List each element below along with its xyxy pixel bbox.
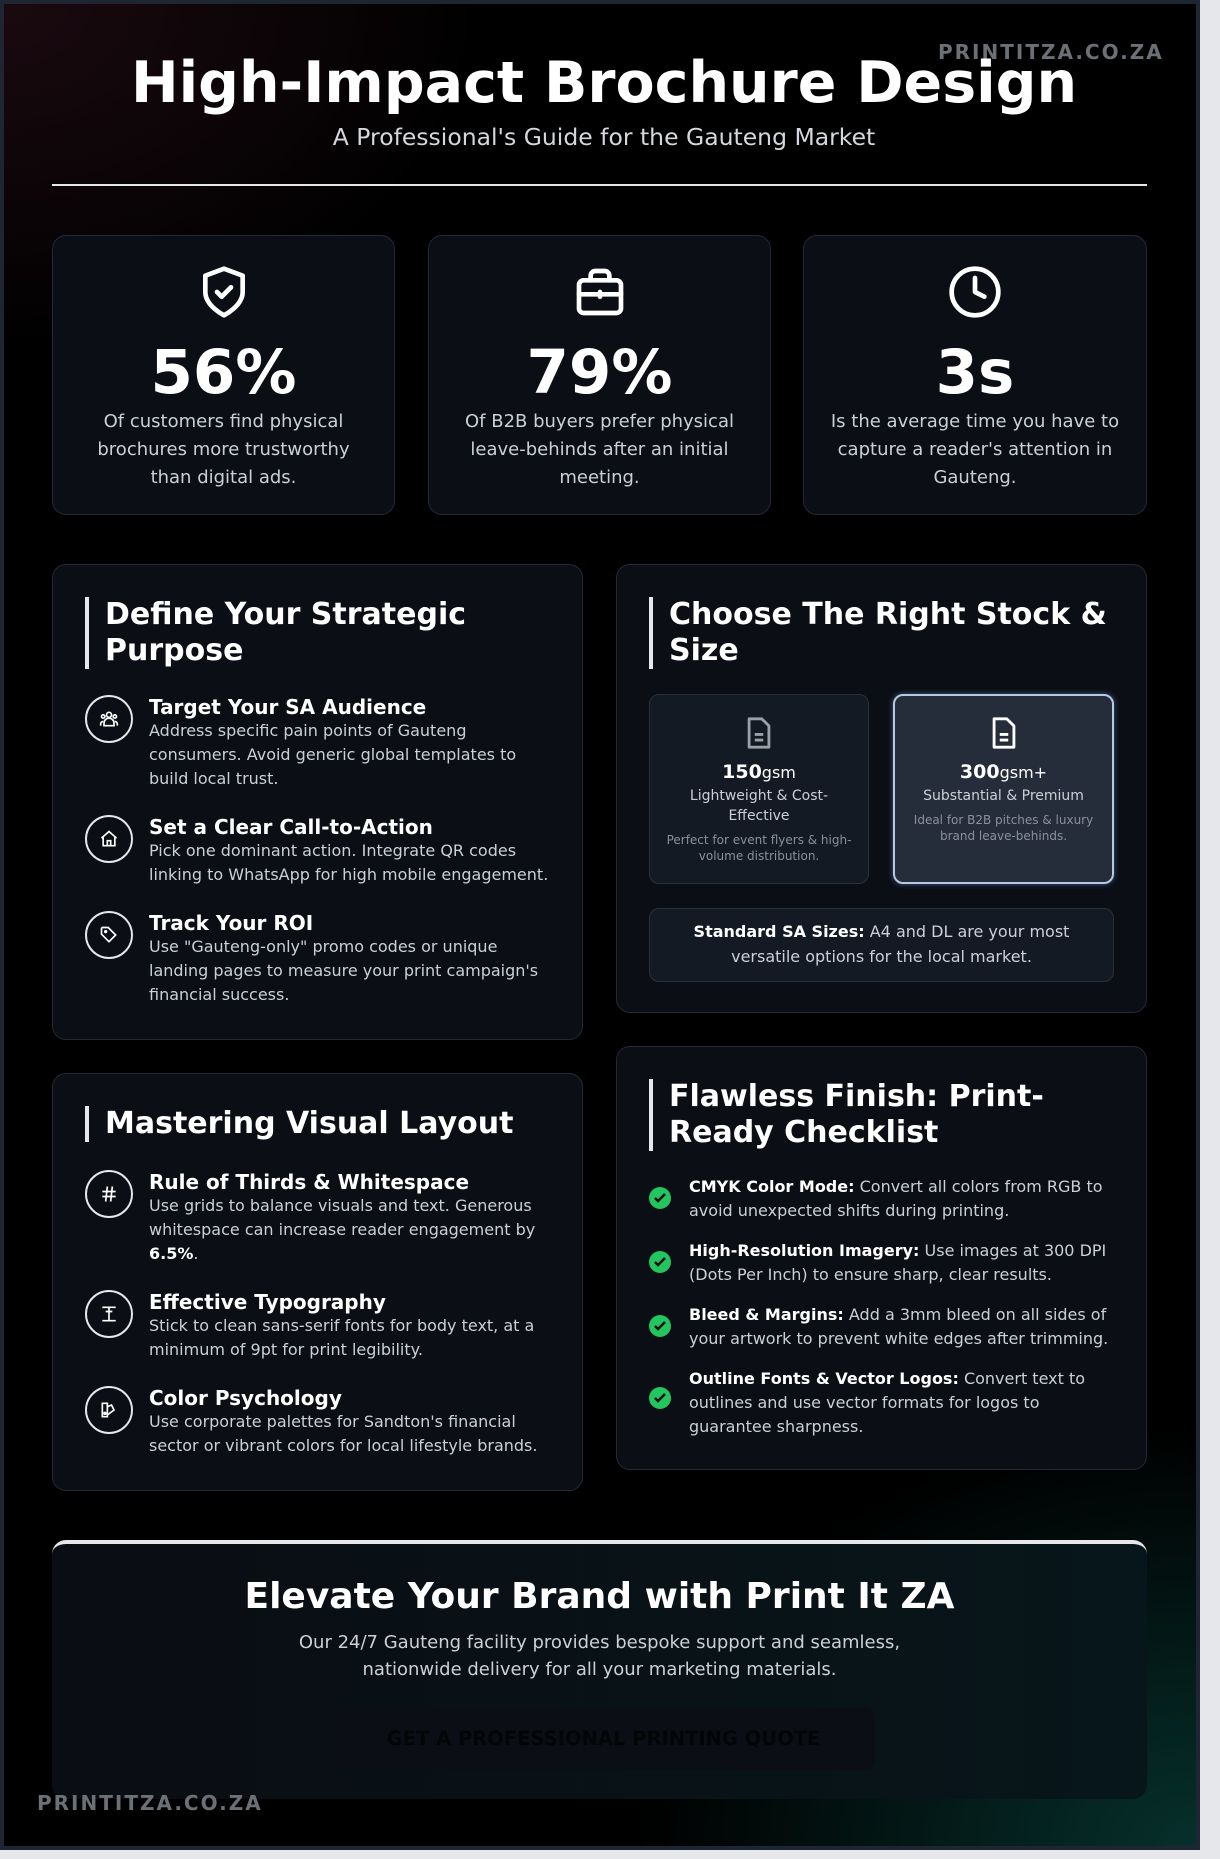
stat card 1: Of customers find physical brochures more trustworthy than digital ads.: [97, 411, 350, 488]
stat card 2: 79%: [526, 337, 672, 408]
CTA text: [299, 1632, 900, 1680]
item: audience: Address specific pain points of Gauteng consumers. Avoid generic global templates to build local trust.: [149, 721, 516, 788]
heading: [85, 597, 466, 669]
stat card 3: 3s: [936, 337, 1014, 408]
item: rule of thirds: Rule of Thirds & Whitespace: [149, 1170, 469, 1194]
heading: Purpose: [105, 633, 243, 668]
panel: print-ready checklist: [616, 1046, 1147, 1470]
check: resolution: High-Resolution Imagery: Use images at 300 DPI (Dots Per Inch) to ensure sharp, clear results.: [689, 1241, 1106, 1284]
icon: briefcase: [576, 268, 624, 316]
item: ROI: [85, 911, 538, 1004]
item: ROI: Use "Gauteng-only" promo codes or unique landing pages to measure your print campaign's financial success.: [149, 937, 538, 1004]
CTA button: GET A PROFESSIONAL PRINTING QUOTE: [387, 1727, 820, 1750]
watermark top: PRINTITZA.CO.ZA: [938, 40, 1164, 64]
watermark bottom: PRINTITZA.CO.ZA: [37, 1791, 263, 1815]
stock card 150gsm: [649, 694, 869, 884]
item: rule of thirds: [85, 1170, 535, 1263]
stat card 2: [428, 235, 771, 515]
CTA button: [332, 1708, 875, 1770]
item: color: [85, 1386, 537, 1455]
sizes note: Standard SA Sizes: A4 and DL are your most: [694, 922, 1069, 941]
check: fonts: Outline Fonts & Vector Logos: Convert text to outlines and use vector formats for logos to guarantee sharpness.: [689, 1369, 1085, 1436]
panel: stock & size: [616, 564, 1147, 1013]
heading: Define Your Strategic: [105, 597, 466, 632]
title: High-Impact Brochure Design: [131, 50, 1077, 116]
stat card 1: [52, 235, 395, 515]
item: CTA: Pick one dominant action. Integrate QR codes linking to WhatsApp for high mobile engagement.: [149, 841, 548, 884]
panel: visual layout: [52, 1073, 583, 1491]
stock card 150gsm: Lightweight & Cost-Effective: [690, 788, 828, 824]
item: CTA: [85, 815, 548, 884]
stock card 300gsm: Substantial & Premium: [923, 788, 1084, 804]
heading: Ready Checklist: [669, 1115, 938, 1150]
icon: shield: [203, 266, 245, 318]
stat card 2: Of B2B buyers prefer physical leave-behinds after an initial meeting.: [465, 411, 734, 488]
stock card 300gsm: [893, 694, 1114, 884]
item: audience: Target Your SA Audience: [149, 695, 426, 719]
item: typography: Stick to clean sans-serif fonts for body text, at a minimum of 9pt for print legibility.: [149, 1316, 534, 1359]
item: CTA: Set a Clear Call-to-Action: [149, 815, 433, 839]
stock card 150gsm: Perfect for event flyers & high-volume distribution.: [667, 833, 851, 863]
item: typography: Effective Typography: [149, 1290, 386, 1314]
heading: Mastering Visual Layout: [105, 1106, 513, 1141]
CTA text: nationwide delivery for all your marketing materials.: [363, 1659, 836, 1680]
CTA heading: Elevate Your Brand with Print It ZA: [244, 1576, 954, 1617]
stock card 300gsm: 300gsm+: [960, 761, 1047, 783]
heading: [649, 1079, 1044, 1151]
CTA panel: [52, 1540, 1147, 1799]
icon: clock: [949, 266, 1001, 318]
stock card 150gsm: 150gsm: [722, 761, 796, 783]
check: bleed: Bleed & Margins: Add a 3mm bleed on all sides of your artwork to prevent white edges after trimming.: [689, 1305, 1108, 1348]
item: rule of thirds: Use grids to balance visuals and text. Generous whitespace can increase reader engagement by 6.5%.: [149, 1196, 535, 1263]
item: color: Color Psychology: [149, 1386, 342, 1410]
stat card 3: Is the average time you have to capture a reader's attention in Gauteng.: [831, 411, 1119, 488]
heading: Choose The Right Stock &: [669, 597, 1107, 632]
item: ROI: Track Your ROI: [149, 911, 313, 935]
heading: [649, 597, 1107, 669]
CTA text: Our 24/7 Gauteng facility provides bespoke support and seamless,: [299, 1632, 900, 1653]
item: typography: [85, 1290, 534, 1359]
check: CMYK: CMYK Color Mode: Convert all colors from RGB to avoid unexpected shifts during printing.: [689, 1177, 1103, 1220]
subtitle: A Professional's Guide for the Gauteng Market: [333, 123, 875, 151]
stock card 300gsm: Ideal for B2B pitches & luxury brand leave-behinds.: [914, 813, 1093, 843]
item: color: Use corporate palettes for Sandton's financial sector or vibrant colors for local lifestyle brands.: [149, 1412, 537, 1455]
heading: Size: [669, 633, 739, 668]
stat card 1: 56%: [150, 337, 296, 408]
sizes note: [649, 908, 1114, 982]
sizes note: versatile options for the local market.: [731, 947, 1032, 966]
panel: strategic purpose: [52, 564, 583, 1040]
stat card 3: [803, 235, 1147, 515]
item: audience: [85, 695, 516, 788]
heading: Flawless Finish: Print-: [669, 1079, 1044, 1114]
